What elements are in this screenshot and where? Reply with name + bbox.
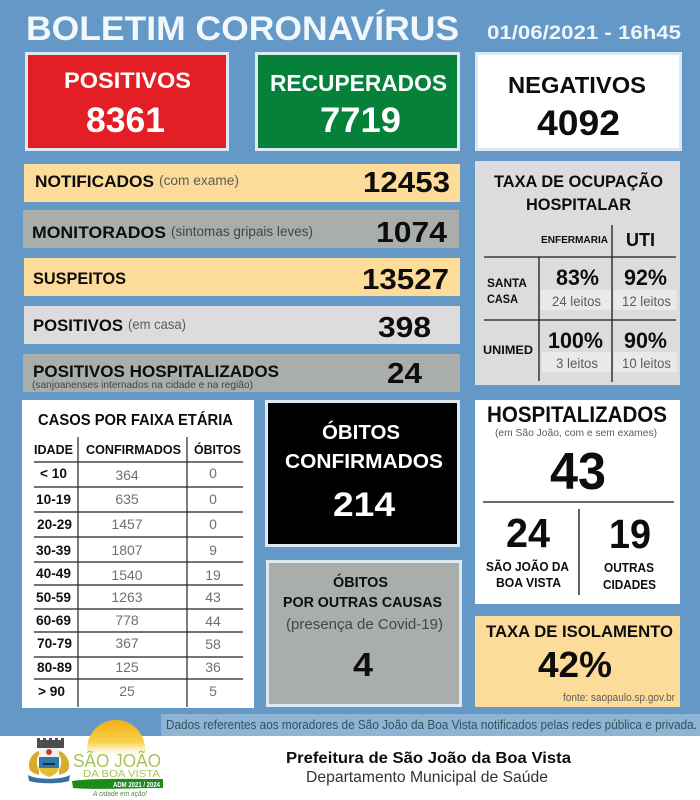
bar: positivos hospitalizados: 24	[387, 358, 422, 390]
bar: notificados: 12453	[363, 167, 450, 199]
panel: recuperados: 7719	[320, 101, 401, 140]
logo: sun	[87, 720, 145, 757]
panel: hospitalizados: HOSPITALIZADOS	[487, 402, 667, 427]
logo: wordmark são joão da boa vista: ADM 2021 / 2024	[113, 782, 160, 789]
panel: óbitos confirmados	[266, 402, 458, 546]
panel: positivos: POSITIVOS	[64, 68, 191, 93]
panel: hospitalizados: (em São João, com e sem exames)	[495, 427, 657, 439]
panel: taxa de ocupação hospitalar: 3 leitos	[556, 356, 598, 371]
panel: taxa de isolamento: 42%	[538, 644, 612, 685]
panel: taxa de ocupação hospitalar: 83%	[556, 265, 599, 290]
bar: monitorados	[23, 210, 459, 249]
panel: taxa de ocupação hospitalar: 90%	[624, 328, 667, 353]
panel: taxa de ocupação hospitalar: 12 leitos	[622, 294, 671, 309]
panel: casos por faixa etária: < 10	[40, 465, 67, 481]
panel: taxa de isolamento: fonte: saopaulo.sp.gov.br	[563, 692, 675, 704]
bar: positivos hospitalizados	[23, 354, 460, 392]
logo: wordmark são joão da boa vista: SÃO JOÃO	[73, 750, 161, 771]
icon: municipal crest	[28, 738, 70, 783]
panel: taxa de ocupação hospitalar: CASA	[487, 292, 518, 306]
logo: wordmark são joão da boa vista: A cidade em ação!	[92, 791, 147, 798]
panel: casos por faixa etária: 0	[209, 516, 217, 532]
panel: casos por faixa etária: 778	[115, 612, 139, 628]
panel: casos por faixa etária: CASOS POR FAIXA ETÁRIA	[38, 412, 233, 429]
footer note	[161, 714, 700, 736]
panel: óbitos confirmados: 214	[333, 486, 395, 524]
bar: monitorados: (sintomas gripais leves)	[171, 224, 313, 239]
bar: suspeitos	[24, 258, 460, 296]
panel: casos por faixa etária: ÓBITOS	[194, 442, 241, 457]
panel: hospitalizados: 19	[609, 511, 651, 557]
panel: taxa de ocupação hospitalar: TAXA DE OCUPAÇÃO	[494, 171, 663, 191]
panel: taxa de isolamento	[475, 616, 680, 707]
panel: hospitalizados: CIDADES	[603, 577, 656, 592]
panel: hospitalizados: 24	[506, 510, 550, 556]
panel: taxa de ocupação hospitalar: 24 leitos	[552, 294, 601, 309]
footer: departamento: Departamento Municipal de Saúde	[306, 769, 548, 786]
panel: hospitalizados: OUTRAS	[604, 560, 654, 575]
panel: hospitalizados	[475, 400, 680, 604]
panel: casos por faixa etária: 9	[209, 542, 217, 558]
bar: positivos em casa: 398	[378, 312, 431, 344]
bar: suspeitos: SUSPEITOS	[33, 270, 126, 288]
panel: hospitalizados: SÃO JOÃO DA	[486, 559, 570, 574]
panel: negativos	[476, 54, 680, 150]
panel: recuperados: RECUPERADOS	[270, 70, 447, 96]
panel: óbitos por outras causas: 4	[353, 646, 374, 683]
panel: positivos: 8361	[86, 101, 165, 140]
panel: casos por faixa etária: CONFIRMADOS	[86, 443, 181, 457]
panel: taxa de ocupação hospitalar	[475, 161, 680, 385]
bar: notificados: (com exame)	[159, 173, 239, 188]
panel: casos por faixa etária: 25	[119, 683, 135, 699]
panel: casos por faixa etária: IDADE	[34, 443, 73, 457]
title: BOLETIM CORONAVÍRUS	[26, 10, 459, 48]
panel: óbitos por outras causas: POR OUTRAS CAUSAS	[283, 595, 442, 611]
panel: casos por faixa etária: 1263	[111, 589, 143, 605]
panel: casos por faixa etária: 364	[115, 467, 139, 483]
panel: casos por faixa etária: 60-69	[36, 612, 71, 628]
bar: positivos em casa	[24, 306, 460, 344]
bar: suspeitos: 13527	[362, 264, 449, 296]
panel: casos por faixa etária: 30-39	[36, 542, 71, 558]
bar: monitorados: 1074	[376, 217, 447, 249]
panel: taxa de isolamento: TAXA DE ISOLAMENTO	[486, 623, 673, 641]
panel: recuperados	[256, 54, 458, 150]
bar: positivos em casa: POSITIVOS	[33, 317, 123, 335]
panel: casos por faixa etária: 0	[209, 491, 217, 507]
panel: casos por faixa etária: 80-89	[37, 659, 72, 675]
panel: casos por faixa etária: 635	[115, 491, 139, 507]
panel: casos por faixa etária: 36	[205, 659, 221, 675]
panel: casos por faixa etária: 125	[115, 659, 139, 675]
panel: casos por faixa etária: 0	[209, 465, 217, 481]
panel: taxa de ocupação hospitalar: HOSPITALAR	[526, 195, 631, 214]
panel: óbitos confirmados: CONFIRMADOS	[285, 450, 443, 473]
panel: casos por faixa etária: 70-79	[37, 635, 72, 651]
panel: hospitalizados: 43	[550, 443, 606, 501]
panel: casos por faixa etária	[22, 400, 254, 708]
panel: negativos: NEGATIVOS	[508, 72, 646, 98]
panel: taxa de ocupação hospitalar: 10 leitos	[622, 356, 671, 371]
date and time: 01/06/2021 - 16h45	[487, 22, 681, 44]
panel: casos por faixa etária: > 90	[38, 683, 65, 699]
panel: casos por faixa etária: 1807	[111, 542, 143, 558]
bar: notificados: NOTIFICADOS	[35, 173, 154, 191]
panel: casos por faixa etária: 20-29	[37, 516, 72, 532]
bar: positivos hospitalizados: POSITIVOS HOSPITALIZADOS	[33, 362, 279, 381]
bar: positivos hospitalizados: (sanjoanenses internados na cidade e na região)	[32, 379, 253, 391]
panel: casos por faixa etária: 10-19	[36, 491, 71, 507]
panel: casos por faixa etária: 1540	[111, 567, 143, 583]
panel: casos por faixa etária: 43	[205, 589, 221, 605]
bar: notificados	[24, 164, 460, 202]
panel: casos por faixa etária: 40-49	[36, 565, 71, 581]
footer: prefeitura: Prefeitura de São João da Boa Vista	[286, 750, 571, 767]
panel: casos por faixa etária: 50-59	[36, 589, 71, 605]
bar: positivos em casa: (em casa)	[128, 317, 186, 332]
panel: casos por faixa etária: 19	[205, 567, 221, 583]
panel: taxa de ocupação hospitalar: UTI	[626, 230, 655, 250]
panel: taxa de ocupação hospitalar: 92%	[624, 265, 667, 290]
panel: positivos	[26, 54, 228, 150]
panel: casos por faixa etária: 58	[205, 636, 221, 652]
footer band	[0, 736, 700, 800]
panel: taxa de ocupação hospitalar: 100%	[548, 328, 603, 353]
panel: casos por faixa etária: 5	[209, 683, 217, 699]
panel: óbitos por outras causas	[268, 562, 460, 706]
panel: negativos: 4092	[537, 104, 620, 143]
panel: óbitos confirmados: ÓBITOS	[322, 420, 400, 444]
panel: óbitos por outras causas: ÓBITOS	[333, 573, 388, 591]
panel: hospitalizados: BOA VISTA	[496, 575, 562, 590]
panel: casos por faixa etária: 367	[115, 635, 139, 651]
panel: casos por faixa etária: 44	[205, 613, 221, 629]
logo: wordmark são joão da boa vista	[72, 750, 163, 798]
panel: óbitos por outras causas: (presença de Covid-19)	[286, 616, 443, 633]
panel: casos por faixa etária: 1457	[111, 516, 143, 532]
panel: taxa de ocupação hospitalar: UNIMED	[483, 343, 533, 357]
bar: monitorados: MONITORADOS	[32, 223, 166, 242]
panel: taxa de ocupação hospitalar: ENFERMARIA	[541, 234, 608, 246]
panel: taxa de ocupação hospitalar: SANTA	[487, 276, 527, 290]
logo: wordmark são joão da boa vista: DA BOA VISTA	[83, 769, 160, 780]
